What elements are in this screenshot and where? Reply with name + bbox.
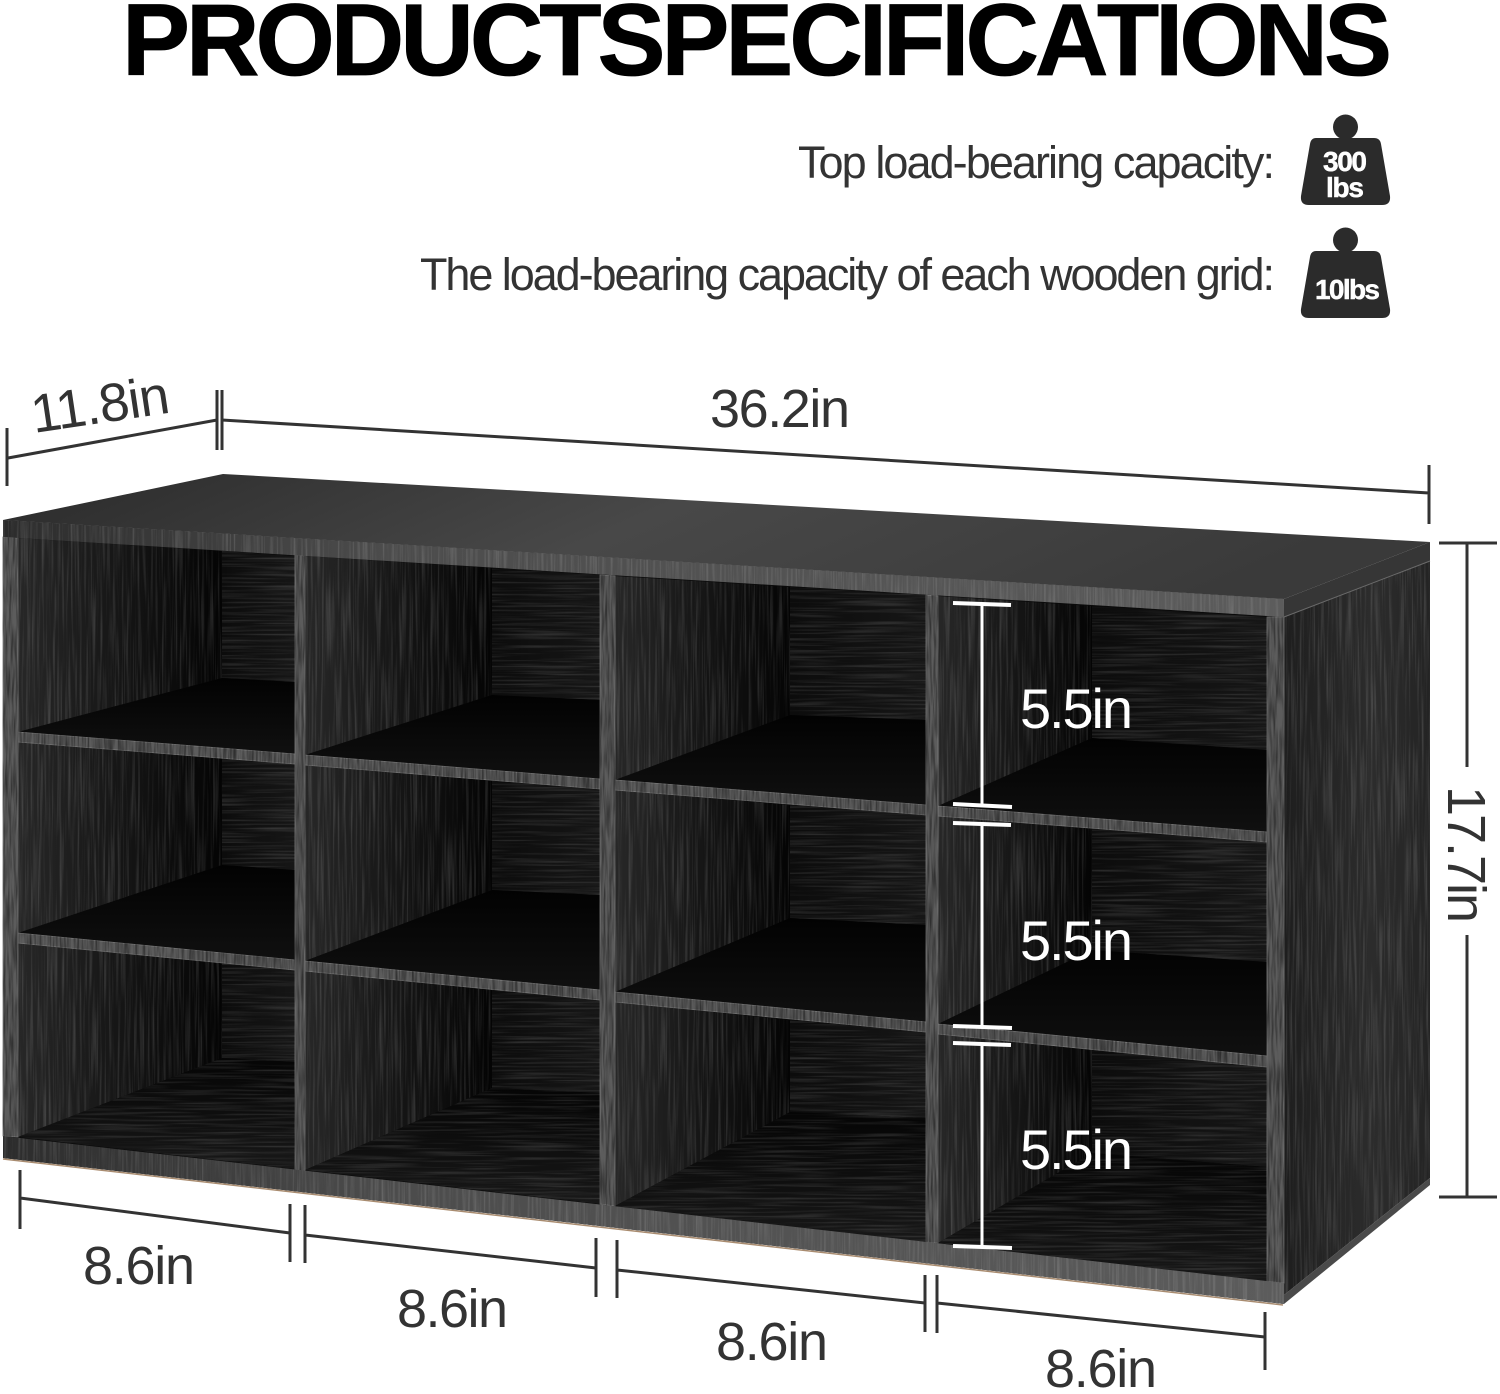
cell row 1 column 1 bbox=[18, 538, 295, 754]
cell row 3 column 4 bbox=[938, 1034, 1267, 1281]
dimension: width 36.2in bbox=[222, 379, 1429, 524]
cell row 2 column 2 bbox=[305, 765, 600, 990]
icon: 300 lbs weight: lbs bbox=[1326, 172, 1364, 203]
dimension: height 17.7in bbox=[1436, 543, 1497, 1197]
dimension: width 36.2in: 36.2in bbox=[710, 379, 850, 439]
dimension: shelf height row 1 bbox=[953, 603, 1133, 807]
dimension: compartment width 3: 8.6in bbox=[716, 1312, 828, 1372]
dimension: depth 11.8in bbox=[7, 365, 217, 486]
top front band bbox=[3, 520, 1284, 617]
capacity row: top load bbox=[798, 114, 1390, 205]
icon: 10 lbs weight: 10lbs bbox=[1315, 274, 1380, 305]
dimension: compartment width 4 bbox=[937, 1275, 1265, 1394]
dimension: shelf height row 2 bbox=[953, 823, 1133, 1028]
dimension: compartment width 2: 8.6in bbox=[397, 1279, 508, 1339]
dimension: compartment width 1 bbox=[20, 1170, 290, 1296]
dimension: height 17.7in: 17.7in bbox=[1436, 786, 1496, 923]
cell row 2 column 4 bbox=[938, 816, 1267, 1056]
label: top load-bearing capacity: Top load-bearing capacity: bbox=[798, 137, 1275, 188]
dimension: shelf height row 3: 5.5in bbox=[1020, 1118, 1133, 1181]
icon: 10 lbs weight bbox=[1301, 228, 1390, 318]
vertical posts bbox=[3, 537, 1284, 1283]
icon: 300 lbs weight: 300 bbox=[1323, 146, 1367, 177]
icon: 300 lbs weight bbox=[1301, 114, 1390, 205]
cabinet illustration bbox=[3, 474, 1430, 1305]
cabinet front backing bbox=[3, 520, 1284, 1304]
cell row 3 column 2 bbox=[305, 971, 600, 1204]
capacity row: each grid bbox=[420, 228, 1390, 318]
cell row 1 column 2 bbox=[305, 556, 600, 779]
shelf edges bbox=[18, 732, 1267, 1067]
dimension: compartment width 1: 8.6in bbox=[83, 1236, 195, 1296]
cabinet right side bbox=[1284, 542, 1430, 1304]
bottom edge line bbox=[3, 1159, 1283, 1305]
dimension: shelf height row 1: 5.5in bbox=[1020, 677, 1133, 740]
dimension: compartment width 3 bbox=[617, 1240, 925, 1372]
dimension: shelf height row 2: 5.5in bbox=[1020, 909, 1133, 972]
cell row 2 column 1 bbox=[18, 742, 295, 960]
cell row 1 column 4 bbox=[938, 596, 1267, 832]
bottom front band bbox=[3, 1136, 1284, 1304]
cell row 3 column 3 bbox=[615, 1002, 926, 1242]
cell row 3 column 1 bbox=[18, 943, 295, 1169]
dimension: depth 11.8in: 11.8in bbox=[27, 365, 173, 445]
cell row 2 column 3 bbox=[615, 790, 926, 1022]
dimension: compartment width 2 bbox=[305, 1205, 596, 1339]
label: load-bearing capacity of each grid: The load-bearing capacity of each wooden grid: bbox=[420, 249, 1275, 300]
cell row 1 column 3 bbox=[615, 576, 926, 805]
cabinet top surface bbox=[3, 474, 1430, 599]
dimension: shelf height row 3 bbox=[953, 1043, 1133, 1248]
